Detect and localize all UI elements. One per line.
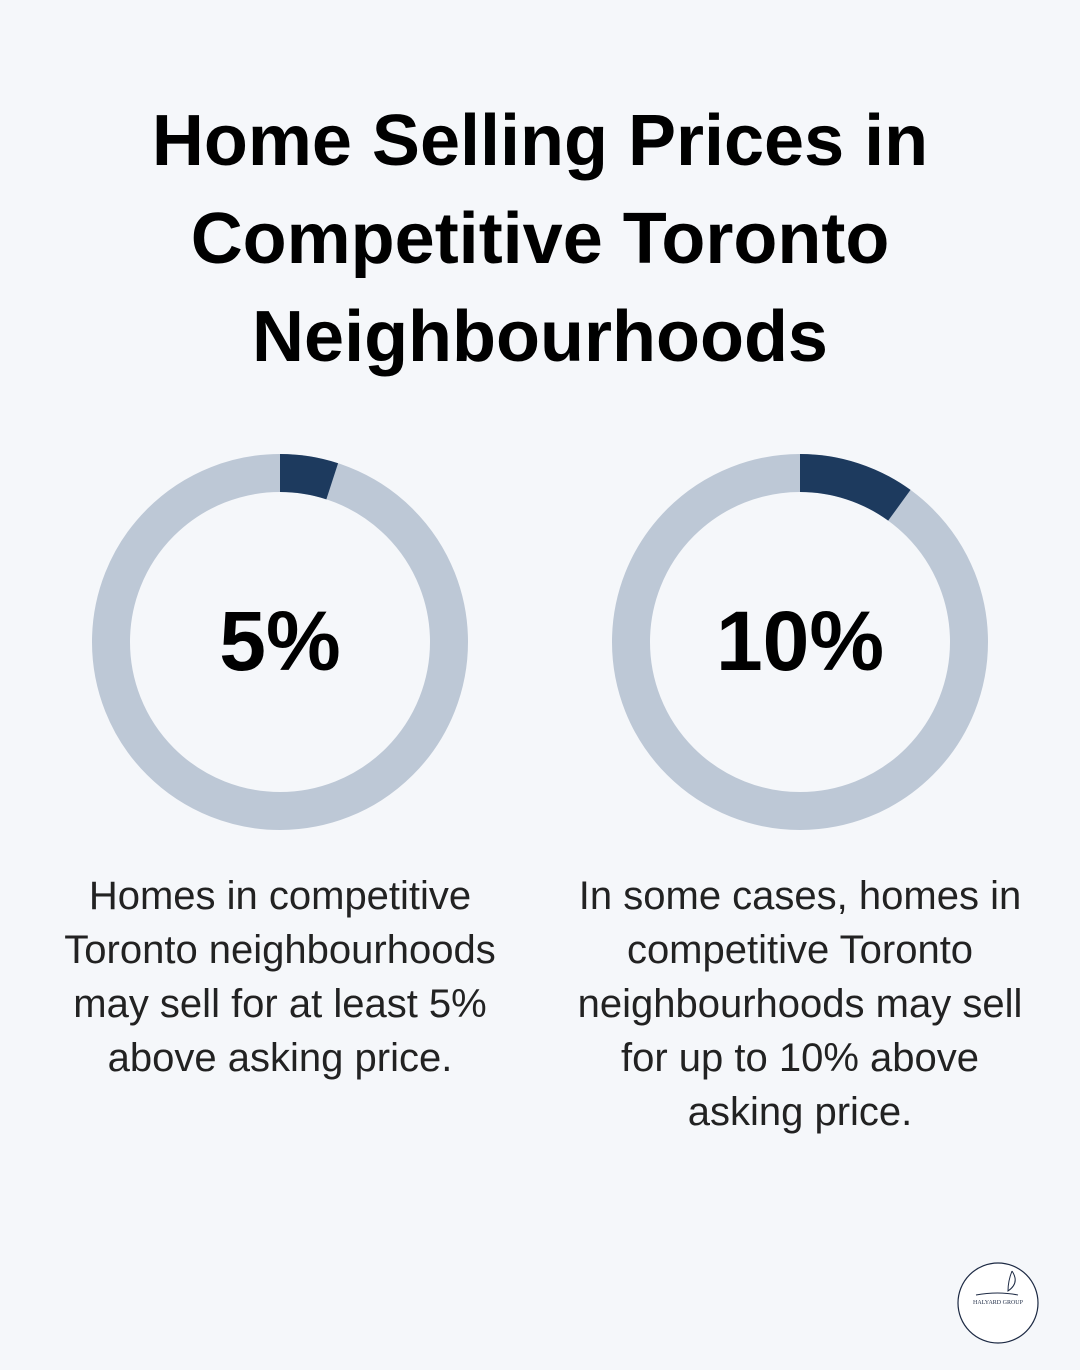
chart: donut 10%: 10% [716, 594, 884, 688]
chart: donut 5%: 5% [219, 594, 341, 688]
text block: right: neighbourhoods may sell [578, 982, 1022, 1026]
chart: donut 5% [92, 454, 468, 830]
text block: left: above asking price. [108, 1036, 452, 1080]
title: Home Selling Prices in [152, 101, 928, 181]
text block: right: In some cases, homes in [579, 874, 1021, 918]
text block: left [64, 874, 496, 1080]
icon: logo [957, 1262, 1039, 1344]
text block: right [578, 874, 1022, 1134]
text block: right: asking price. [688, 1090, 912, 1134]
text block: left: Homes in competitive [89, 874, 471, 918]
icon: logo: HALYARD GROUP [973, 1300, 1024, 1306]
title: Neighbourhoods [252, 297, 828, 377]
title: Competitive Toronto [191, 199, 889, 279]
text block: left: Toronto neighbourhoods [64, 928, 496, 972]
text block: right: for up to 10% above [621, 1036, 979, 1080]
title [152, 101, 928, 377]
chart: donut 10% [612, 454, 988, 830]
text block: right: competitive Toronto [627, 928, 973, 972]
text block: left: may sell for at least 5% [73, 982, 487, 1026]
